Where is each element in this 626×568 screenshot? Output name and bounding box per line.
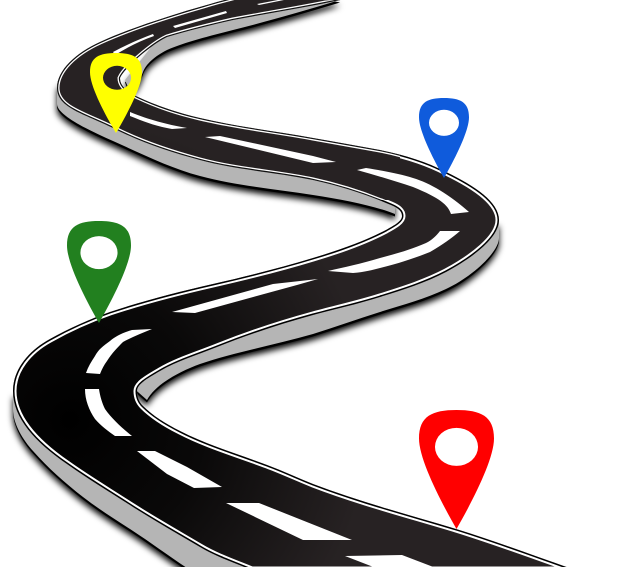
road side wall <box>13 0 499 568</box>
icon: red map pin <box>419 410 494 529</box>
bottom image edge <box>0 567 626 568</box>
road drop shadow <box>13 0 499 568</box>
icon: yellow map pin <box>90 53 142 133</box>
icon: green map pin <box>67 221 131 323</box>
road centre dashes <box>85 0 469 568</box>
icon: blue map pin <box>419 98 469 178</box>
